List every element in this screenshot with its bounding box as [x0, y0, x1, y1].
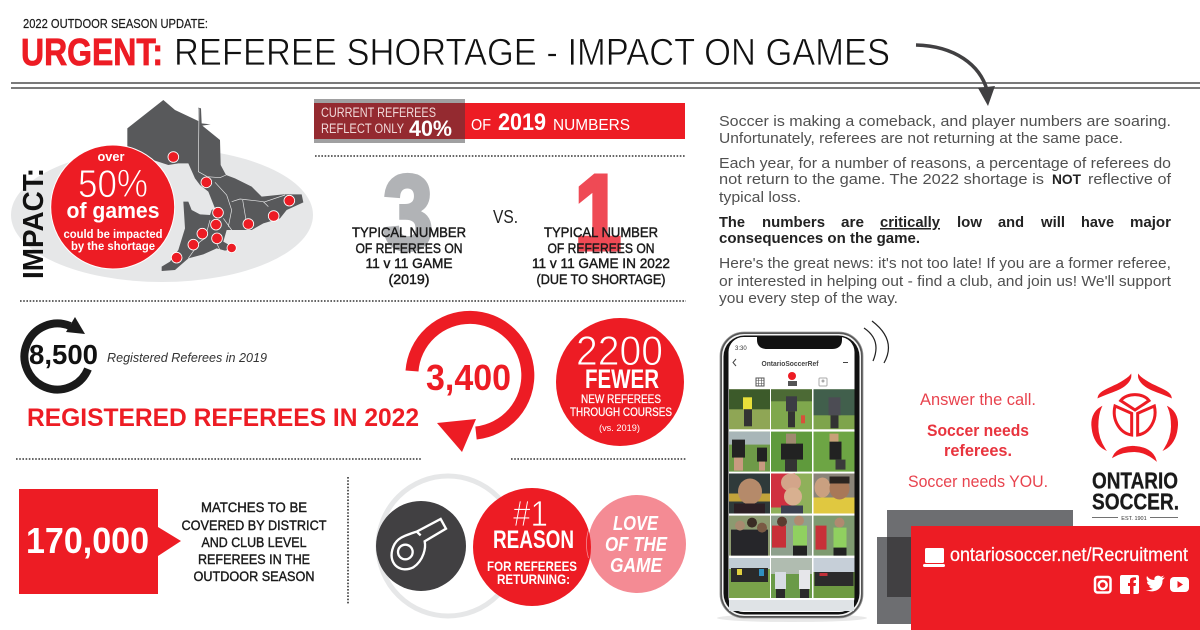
comparison: 1 referee in 2022: OF REFEREES ON — [548, 240, 654, 256]
comparison: 3 referees in 2019: (2019) — [388, 271, 430, 287]
callout: over 50% of games: over — [98, 149, 124, 164]
comparison: 3 referees in 2019: TYPICAL NUMBER — [352, 224, 466, 240]
comparison: 1 referee in 2022: 1 — [575, 154, 621, 272]
banner: 40% of 2019 numbers: CURRENT REFEREES — [321, 105, 436, 120]
icon: ringing signal arcs — [864, 321, 888, 363]
text block: message: and — [998, 214, 1024, 231]
icon: laptop — [923, 548, 945, 567]
stat: 3,400 with red arrow — [412, 317, 528, 452]
heading: registered referees in 2022: REGISTERED REFEREES IN 2022 — [27, 404, 419, 432]
text block: call to action: Soccer needs — [927, 422, 1029, 440]
panel: website and social links — [911, 526, 1200, 630]
icon: soccer ball mark — [1092, 375, 1177, 460]
comparison: 1 referee in 2022: TYPICAL NUMBER — [544, 224, 658, 240]
label: vs: VS. — [493, 207, 518, 227]
text block: message: low — [957, 214, 982, 231]
photo grid — [729, 389, 854, 611]
comparison: 3 referees in 2019: 3 — [383, 154, 433, 272]
text block: message: consequences on the game. — [719, 230, 920, 247]
title: REFEREE SHORTAGE - IMPACT ON GAMES — [174, 32, 890, 74]
callout: 2200 fewer new referees — [556, 318, 684, 446]
text block: message: Here's the great news: it's not too late! If you are a former referee, — [719, 255, 1171, 272]
callout: over 50% of games: could be impacted — [64, 229, 162, 241]
stat: 170,000 matches — [19, 489, 326, 594]
stat: 3,400 with red arrow: 3,400 — [426, 357, 511, 398]
text block: message: not return to the game. The 2022 shortage is — [719, 171, 1044, 188]
logo: Ontario Soccer — [1092, 375, 1179, 522]
banner: 40% of 2019 numbers — [314, 99, 685, 143]
text block: message: Soccer is making a comeback, and player numbers are soaring. — [719, 113, 1171, 130]
icon: youtube — [1170, 577, 1189, 592]
phone showing Instagram feed — [717, 332, 867, 622]
panel: impact map — [11, 100, 313, 282]
text block: message: typical loss. — [719, 189, 801, 206]
stat: 170,000 matches: 170,000 — [26, 520, 149, 561]
panel: website and social links: ontariosoccer.net/Recruitment — [950, 545, 1189, 566]
phone showing Instagram feed: 3:30 — [735, 346, 747, 352]
stat: 170,000 matches: OUTDOOR SEASON — [194, 569, 314, 584]
text block: message: will — [1040, 214, 1065, 231]
phone showing Instagram feed: OntarioSoccerRef — [762, 361, 819, 368]
header kicker: 2022 OUTDOOR SEASON UPDATE: — [23, 16, 208, 31]
callout: over 50% of games — [51, 145, 175, 269]
heading: impact: IMPACT: — [18, 168, 50, 279]
stat: 170,000 matches: MATCHES TO BE — [201, 500, 307, 515]
text block: message: NOT — [1052, 171, 1081, 187]
logo: Ontario Soccer: ONTARIO — [1092, 468, 1178, 494]
icon: black circular arrow — [24, 317, 88, 390]
text block: message: The — [719, 214, 745, 231]
text block: message: or interested in helping out - find a club, and join us! We'll support — [719, 273, 1172, 290]
text circle: love of the game: GAME — [610, 555, 663, 577]
panel: #1 reason for referees returning — [376, 476, 686, 616]
comparison: 1 referee in 2022 — [532, 154, 670, 287]
text circle: #1 reason — [473, 488, 591, 606]
stat: 170,000 matches: COVERED BY DISTRICT — [182, 518, 326, 533]
callout: 2200 fewer new referees: THROUGH COURSES — [570, 405, 672, 419]
text block: call to action: referees. — [944, 442, 1012, 460]
callout: 2200 fewer new referees: 2200 — [576, 327, 663, 374]
text block: message: Each year, for a number of reasons, a percentage of referees do — [719, 155, 1171, 172]
stat: 8,500 registered referees in 2019 — [24, 317, 267, 390]
banner: 40% of 2019 numbers: REFLECT ONLY — [321, 121, 404, 136]
banner: 40% of 2019 numbers: 2019 — [498, 109, 546, 136]
tabs — [756, 372, 827, 386]
text block: message: numbers — [762, 214, 825, 231]
text block: message: reflective of — [1088, 171, 1172, 188]
icon: instagram — [1095, 577, 1110, 592]
callout: 2200 fewer new referees: FEWER — [585, 364, 659, 394]
text block: call to action — [908, 391, 1048, 491]
logo: Ontario Soccer: SOCCER. — [1092, 488, 1179, 514]
banner: 40% of 2019 numbers: 40% — [409, 116, 452, 141]
comparison: 3 referees in 2019: OF REFEREES ON — [356, 240, 462, 256]
title: URGENT: — [21, 32, 163, 74]
ellipse backdrop — [11, 148, 313, 282]
text block: message: have — [1081, 214, 1114, 231]
callout: 2200 fewer new referees: (vs. 2019) — [599, 423, 640, 434]
banner: 40% of 2019 numbers: NUMBERS — [553, 117, 630, 134]
callout: 2200 fewer new referees: NEW REFEREES — [581, 392, 661, 406]
stat: 8,500 registered referees in 2019: Registered Referees in 2019 — [107, 351, 267, 365]
comparison: 3 referees in 2019 — [352, 154, 466, 287]
text circle: #1 reason: RETURNING: — [497, 571, 570, 587]
text circle: love of the game: OF THE — [605, 534, 668, 556]
banner: 40% of 2019 numbers: OF — [471, 117, 491, 134]
logo: Ontario Soccer: EST. 1901 — [1121, 516, 1147, 522]
text circle: #1 reason: #1 — [513, 493, 548, 534]
text block: call to action: Answer the call. — [920, 391, 1036, 409]
callout: over 50% of games: of games — [66, 198, 160, 223]
text block: message: are — [841, 214, 864, 231]
stat: 8,500 registered referees in 2019: 8,500 — [29, 339, 98, 370]
text block: message: Unfortunately, referees are not returning at the same pace. — [719, 130, 1123, 147]
arrow: title to body text — [916, 45, 995, 106]
text circle: #1 reason: REASON — [493, 526, 574, 554]
comparison: 1 referee in 2022: (DUE TO SHORTAGE) — [536, 271, 666, 287]
text block: message — [719, 113, 1172, 307]
stat: 170,000 matches: REFEREES IN THE — [198, 552, 310, 567]
text circle: #1 reason: FOR REFEREES — [487, 558, 577, 574]
icon: whistle — [376, 501, 466, 591]
map of Ontario — [127, 100, 303, 271]
callout: over 50% of games: 50% — [78, 163, 148, 206]
stat: 170,000 matches: AND CLUB LEVEL — [202, 535, 307, 550]
comparison: 1 referee in 2022: 11 v 11 GAME IN 2022 — [532, 255, 670, 271]
text block: message: critically — [880, 214, 941, 231]
text block: message: you every step of the way. — [719, 290, 898, 307]
decorative grey blocks — [877, 510, 1073, 624]
text block: call to action: Soccer needs YOU. — [908, 473, 1048, 491]
text circle: love of the game: LOVE — [613, 513, 659, 535]
text block: message: major — [1130, 214, 1171, 231]
callout: over 50% of games: by the shortage — [71, 241, 155, 253]
comparison: 3 referees in 2019: 11 v 11 GAME — [366, 255, 452, 271]
icon: facebook — [1120, 575, 1139, 594]
text circle: love of the game — [588, 495, 686, 593]
icon: twitter — [1146, 576, 1165, 591]
